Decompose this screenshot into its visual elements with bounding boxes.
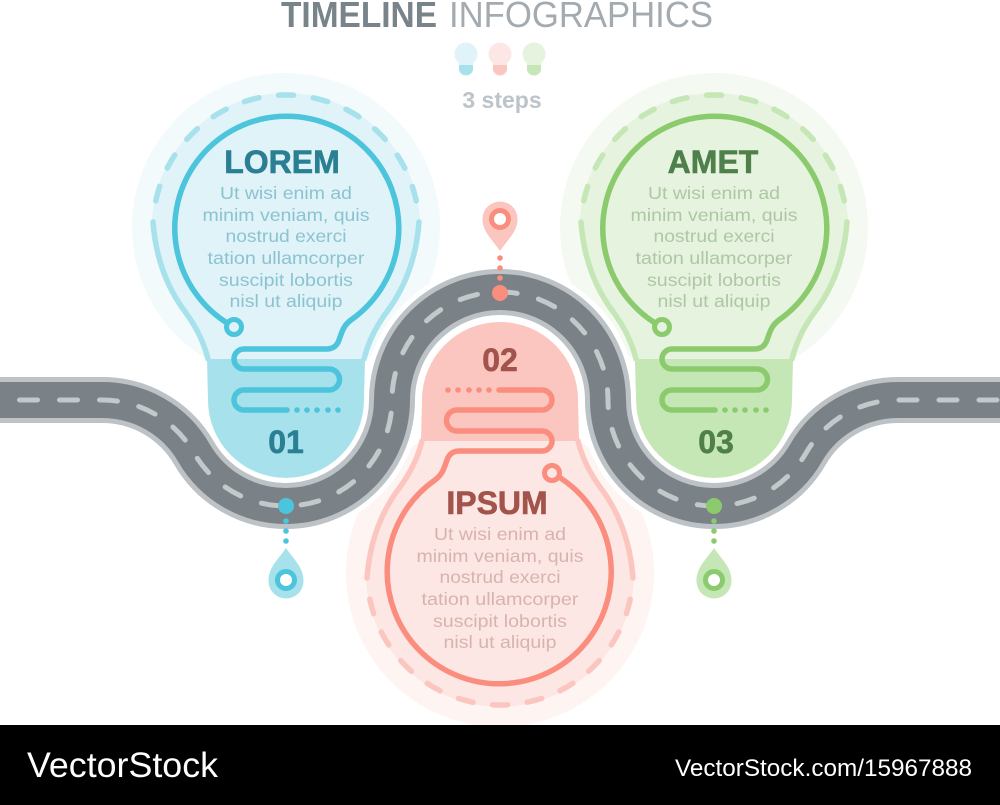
- icon: green map pin: [696, 498, 732, 598]
- number: 01: 01: [268, 424, 304, 460]
- text: AMET panel: Ut wisi enim ad: [648, 183, 780, 203]
- icon: blue map pin: [268, 498, 304, 598]
- subtitle: 3 steps: 3 steps: [462, 87, 542, 113]
- text: IPSUM panel: minim veniam, quis: [416, 546, 584, 566]
- text: IPSUM panel: [416, 485, 584, 652]
- number: 02: 02: [482, 342, 518, 378]
- text: LOREM panel: LOREM: [224, 144, 340, 180]
- road: [0, 292, 1000, 506]
- text: LOREM panel: tation ullamcorper: [208, 248, 365, 268]
- text: IPSUM panel: IPSUM: [446, 485, 548, 521]
- text: AMET panel: nostrud exerci: [654, 226, 774, 246]
- text: AMET panel: AMET: [668, 144, 759, 180]
- text: LOREM panel: [202, 144, 370, 311]
- icon: red map pin: [482, 202, 518, 301]
- text: LOREM panel: minim veniam, quis: [202, 205, 370, 225]
- footer bar: VectorStock: [27, 746, 219, 785]
- text: IPSUM panel: nostrud exerci: [440, 567, 560, 587]
- text: LOREM panel: nostrud exerci: [226, 226, 346, 246]
- icon: three small bulbs: [454, 42, 546, 76]
- panel: bulb 1 blue: [132, 73, 440, 478]
- text: AMET panel: minim veniam, quis: [630, 205, 798, 225]
- title: [281, 0, 713, 35]
- text: AMET panel: suscipit lobortis: [647, 270, 781, 290]
- footer bar: [0, 725, 1000, 805]
- text: AMET panel: [630, 144, 798, 311]
- number: 03: 03: [698, 424, 734, 460]
- text: LOREM panel: nisl ut aliquip: [230, 291, 342, 311]
- text: LOREM panel: Ut wisi enim ad: [220, 183, 352, 203]
- panel: bulb 2 red: [346, 322, 654, 727]
- text: AMET panel: nisl ut aliquip: [658, 291, 770, 311]
- footer bar: VectorStock.com/15967888: [675, 755, 972, 782]
- text: AMET panel: tation ullamcorper: [636, 248, 793, 268]
- text: IPSUM panel: Ut wisi enim ad: [434, 524, 566, 544]
- text: LOREM panel: suscipit lobortis: [219, 270, 353, 290]
- text: IPSUM panel: suscipit lobortis: [433, 611, 567, 631]
- panel: bulb 3 green: [560, 73, 868, 478]
- text: IPSUM panel: tation ullamcorper: [422, 589, 579, 609]
- text: IPSUM panel: nisl ut aliquip: [444, 632, 556, 652]
